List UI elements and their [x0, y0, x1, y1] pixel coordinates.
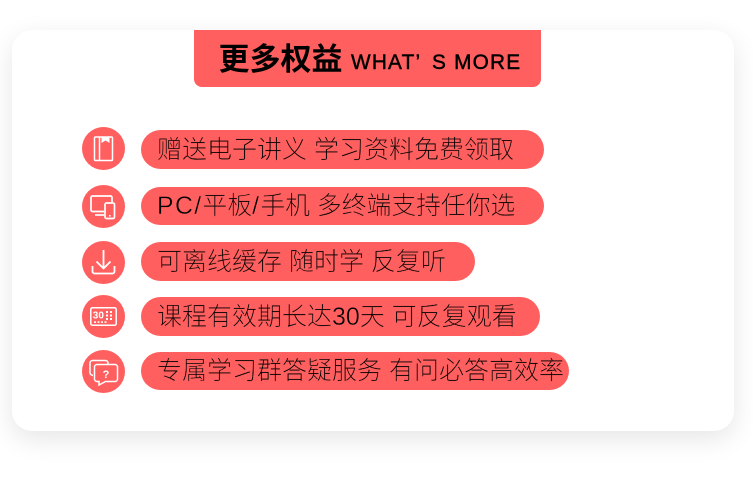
icon: devices	[82, 185, 125, 228]
title: Chinese: 更多权益	[218, 42, 342, 77]
text: benefit 4	[141, 297, 540, 336]
icon: 30-day calendar: 30	[93, 310, 104, 322]
title: English: WHAT’ S MORE	[351, 50, 521, 74]
icon: chat question	[82, 350, 125, 393]
icon: 30-day calendar	[82, 295, 125, 338]
heading: title banner	[194, 30, 541, 87]
text: benefit 1: 赠送电子讲义 学习资料免费领取	[157, 136, 514, 164]
text: benefit 3: 可离线缓存 随时学 反复听	[157, 248, 446, 276]
icon: download	[82, 241, 125, 284]
icon: chat question: ?	[103, 369, 110, 381]
text: benefit 5: 专属学习群答疑服务 有问必答高效率	[157, 357, 564, 385]
text: benefit 2	[141, 187, 544, 225]
text: benefit 1	[141, 130, 544, 169]
text: benefit 4: 课程有效期长达30天 可反复观看	[157, 303, 517, 331]
icon: book	[82, 127, 125, 170]
text: benefit 3	[141, 242, 475, 281]
text: benefit 2: PC/平板/手机 多终端支持任你选	[157, 193, 515, 220]
